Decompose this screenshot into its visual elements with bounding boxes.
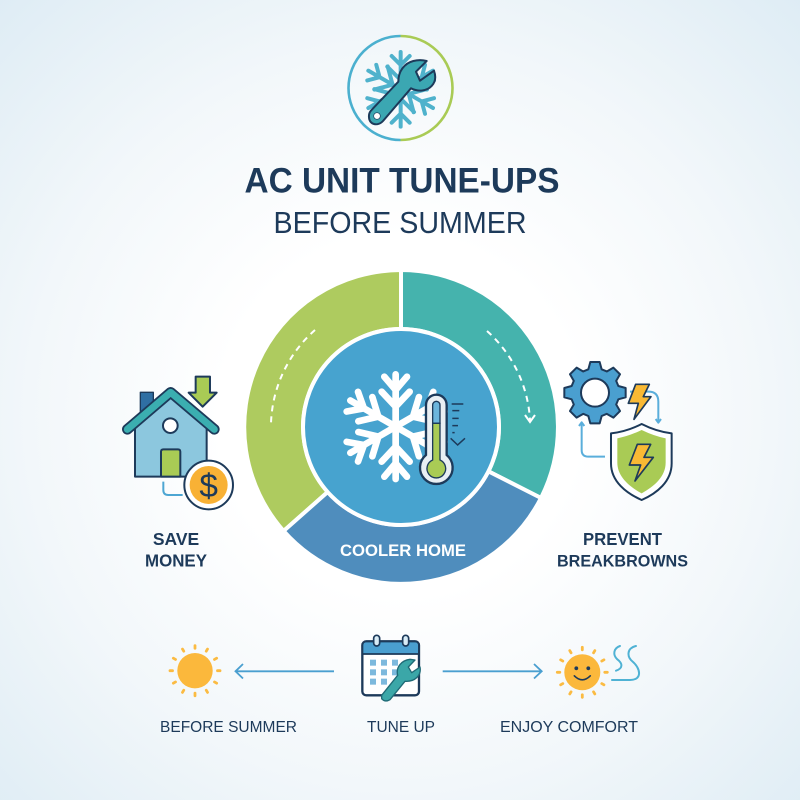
roof (127, 392, 214, 429)
arrow: dashed right (487, 331, 535, 422)
coin (184, 461, 233, 509)
icon: large snowflake (343, 374, 448, 479)
shield bolt (629, 444, 653, 481)
badge snowflake (362, 52, 440, 127)
door (161, 449, 180, 477)
panel: prevent breakdowns (557, 362, 688, 570)
label: tune up: TUNE UP (367, 719, 435, 736)
arrow: to before summer (236, 664, 334, 678)
icon: calendar with wrench (362, 635, 420, 701)
label: prevent: PREVENT (583, 529, 662, 549)
panel: save money (127, 377, 233, 570)
icon: snowflake and wrench badge (348, 36, 452, 140)
house body (135, 395, 207, 477)
small bolt (628, 384, 651, 419)
segment: green (244, 270, 401, 531)
title: AC UNIT TUNE-UPS (244, 160, 560, 200)
segment: cooler home (284, 471, 541, 584)
shield (611, 424, 672, 500)
subtitle: BEFORE SUMMER (274, 205, 526, 240)
down arrow (189, 377, 217, 407)
arrow: dashed left (271, 330, 315, 423)
chart: circular ring diagram (244, 270, 558, 584)
timeline step: before summer (160, 646, 297, 736)
label: before summer: BEFORE SUMMER (160, 719, 297, 736)
icon: house with coin (127, 377, 233, 509)
chimney (140, 392, 153, 413)
window (163, 418, 178, 433)
badge ring (348, 36, 452, 140)
arrow: to enjoy comfort (443, 664, 542, 678)
icon: breeze (612, 646, 639, 680)
timeline step: enjoy comfort (500, 646, 639, 736)
label: breakbrowns: BREAKBROWNS (557, 552, 688, 570)
label: save: SAVE (153, 529, 199, 549)
icon: thermometer (420, 395, 465, 484)
center circle (303, 329, 499, 525)
icon: smiling sun (557, 647, 607, 697)
icon: gear, bolt and shield (564, 362, 672, 500)
label: money: MONEY (145, 550, 207, 570)
segment: teal (401, 270, 558, 498)
gear (564, 362, 626, 423)
connector (163, 482, 183, 495)
icon: sun (170, 646, 220, 696)
dollar sign: $ (199, 468, 218, 505)
label: cooler home: COOLER HOME (340, 542, 466, 560)
arrows (579, 392, 661, 457)
timeline step: tune up (362, 635, 435, 736)
label: enjoy comfort: ENJOY COMFORT (500, 719, 638, 736)
